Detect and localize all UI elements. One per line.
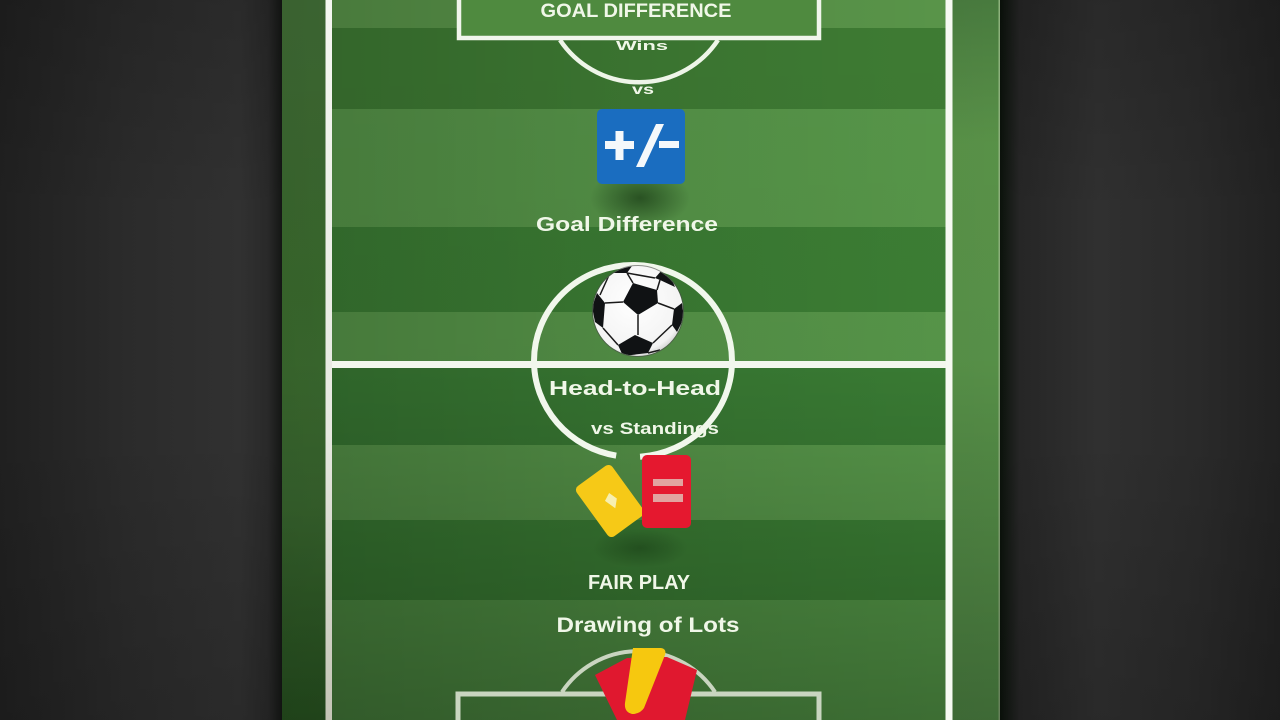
- bottom penalty arc: [562, 651, 715, 692]
- pitch stripes: [332, 0, 946, 720]
- top penalty arc: [560, 40, 718, 82]
- label: head to head: Head-to-Head: [549, 377, 721, 400]
- dark background left: [0, 0, 282, 720]
- pitch shading: [282, 0, 1000, 720]
- icon: soccer ball: [592, 265, 684, 357]
- icon: red card: [642, 455, 691, 528]
- small label vs: vs: [632, 81, 654, 97]
- icon: red lot card: [595, 657, 697, 720]
- small label in arc: Wins: [616, 38, 668, 53]
- halfway line: [332, 361, 946, 368]
- label: drawing of lots: Drawing of Lots: [556, 614, 740, 637]
- icon: yellow card: [574, 463, 646, 539]
- centre circle: [534, 265, 732, 457]
- label: tie breaker sub text: vs Standings: [591, 419, 719, 438]
- pitch side margins: [282, 0, 1000, 720]
- top penalty box: [459, 0, 819, 38]
- label: fair play: FAIR PLAY: [588, 572, 691, 594]
- icon: plus minus shadow: [590, 168, 690, 228]
- dark background right: [1000, 0, 1280, 720]
- bottom penalty box: [458, 694, 819, 720]
- label: goal difference: Goal Difference: [536, 213, 718, 236]
- heading: goal difference: GOAL DIFFERENCE: [540, 0, 732, 22]
- icon shadow: cards: [592, 528, 688, 568]
- touchlines: [326, 0, 952, 720]
- icon: plus minus badge: [597, 109, 685, 184]
- icon: yellow lot card: [625, 648, 666, 714]
